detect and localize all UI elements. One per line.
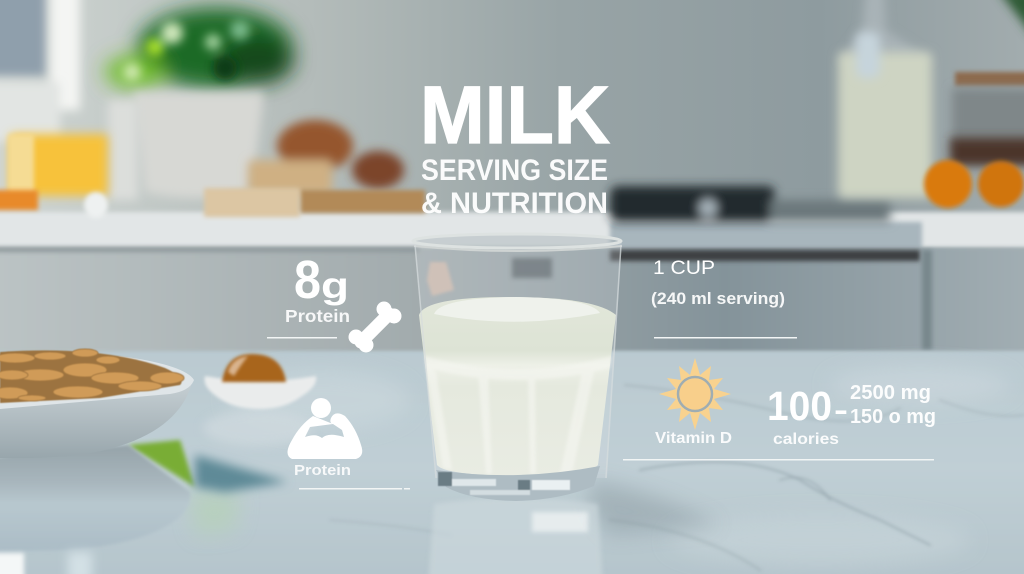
protein amount callout: g <box>321 265 349 306</box>
serving size callout: (240 ml serving) <box>651 289 785 308</box>
protein label <box>294 463 410 490</box>
icon: bone <box>348 302 402 352</box>
table surface highlights <box>230 367 1010 565</box>
protein amount callout <box>267 250 350 338</box>
bowl reflection on table <box>0 440 288 574</box>
subtitle: & NUTRITION <box>421 187 608 220</box>
milk bottle <box>838 0 932 198</box>
icon: sun <box>659 358 731 430</box>
vitamin D label: Vitamin D <box>655 430 732 447</box>
plant in white pot <box>105 8 294 200</box>
small dish with pastry <box>203 354 316 446</box>
protein amount callout: Protein <box>285 306 350 326</box>
jar and oranges <box>924 0 1024 208</box>
orange juice glass <box>0 134 108 218</box>
bowl of cereal <box>0 349 194 458</box>
title: MILK <box>420 70 610 161</box>
calories callout: 2500 mg <box>850 381 931 404</box>
protein label: Protein <box>294 463 351 479</box>
stovetop <box>610 186 890 222</box>
glass reflection <box>428 498 603 574</box>
serving size callout <box>651 257 797 338</box>
marble veins <box>330 385 1024 570</box>
title <box>420 70 610 220</box>
calories callout: - <box>834 394 848 427</box>
calories callout: calories <box>773 431 839 448</box>
subtitle: SERVING SIZE <box>421 154 608 187</box>
protein amount callout: 8 <box>294 250 321 310</box>
calories callout: 100 <box>767 383 832 429</box>
subtitle <box>421 154 608 220</box>
serving size callout: 1 CUP <box>653 257 715 279</box>
icon: glass of milk <box>413 234 720 574</box>
calories callout: 150 o mg <box>850 405 936 428</box>
bread on cutting board <box>204 120 425 217</box>
icon: flexing muscle figure <box>288 398 362 459</box>
calories callout <box>623 381 936 460</box>
